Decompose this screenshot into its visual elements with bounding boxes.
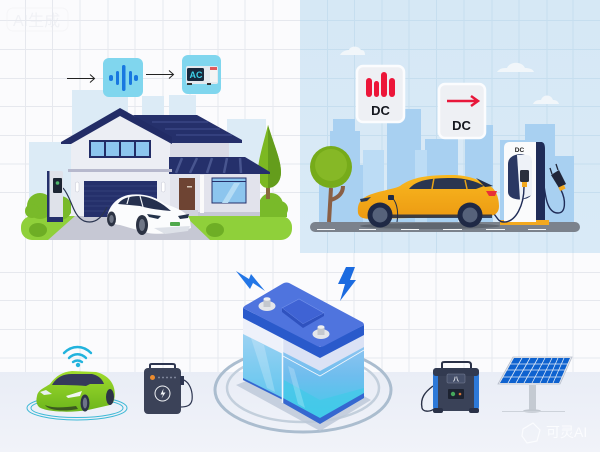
battery right cell [283,332,364,420]
panel: public DC charging [310,47,580,232]
icon: wave signal [103,58,143,97]
icon: blue power station: 八 [453,376,459,384]
house walls [71,116,260,216]
battery [243,282,364,424]
panel: home AC charging [21,55,292,240]
card: DC bars [357,66,404,122]
green car [36,371,115,412]
card: DC bars: DC [371,103,390,118]
highlights [251,338,305,408]
charger [47,171,63,222]
band [68,169,172,172]
battery lid top [243,282,364,347]
tree [258,125,281,199]
arrow: to wave icon [67,74,94,82]
wifi icon [64,347,91,366]
icon: solar panel [498,357,572,413]
watermark: AI generated: AI生成 [13,12,60,30]
icon: AC unit: AC [190,70,203,80]
cable and plug [494,187,524,222]
icon: lightning right [338,267,356,301]
porch roof [169,157,270,174]
terminals [258,297,330,339]
battery left cell [243,318,283,399]
road [310,222,580,232]
lid plate [282,299,324,324]
card: DC arrow: DC [452,118,471,133]
battery lid side [243,308,364,358]
card: DC arrow [439,84,485,138]
white car [107,194,191,235]
upper window [89,140,151,158]
skyline mid tones [363,150,427,222]
watermark: AI generated [7,8,68,31]
battery shadow [236,360,371,431]
panel: floor [0,372,600,452]
icon: blue power station [422,362,479,413]
battery base [243,378,364,424]
watermark: Kling AI [522,423,587,443]
roadside tree [310,146,352,222]
driveway [48,216,210,240]
cable [63,188,107,222]
bushes [25,193,288,237]
charging station [494,142,566,225]
panel: DC charging background [300,0,600,253]
solar roof [133,115,242,143]
yellow car [358,175,500,229]
door [176,178,198,216]
garage door [84,181,157,217]
battery rings [215,348,391,432]
icon: AC unit [182,55,221,94]
arrow: to AC icon [146,70,174,78]
rings [27,396,127,420]
charging station: DC [515,147,524,154]
clouds [340,47,559,104]
city skyline [319,109,574,222]
gable roof [61,108,172,144]
lawn [21,216,292,240]
home skyline [29,90,266,202]
green car group [27,347,127,420]
icon: lightning left [236,271,265,291]
porch window [212,178,246,203]
watermark: Kling AI: 可灵AI [546,424,587,440]
panel: energy storage row [27,267,572,432]
icon: portable power bank [144,364,192,414]
